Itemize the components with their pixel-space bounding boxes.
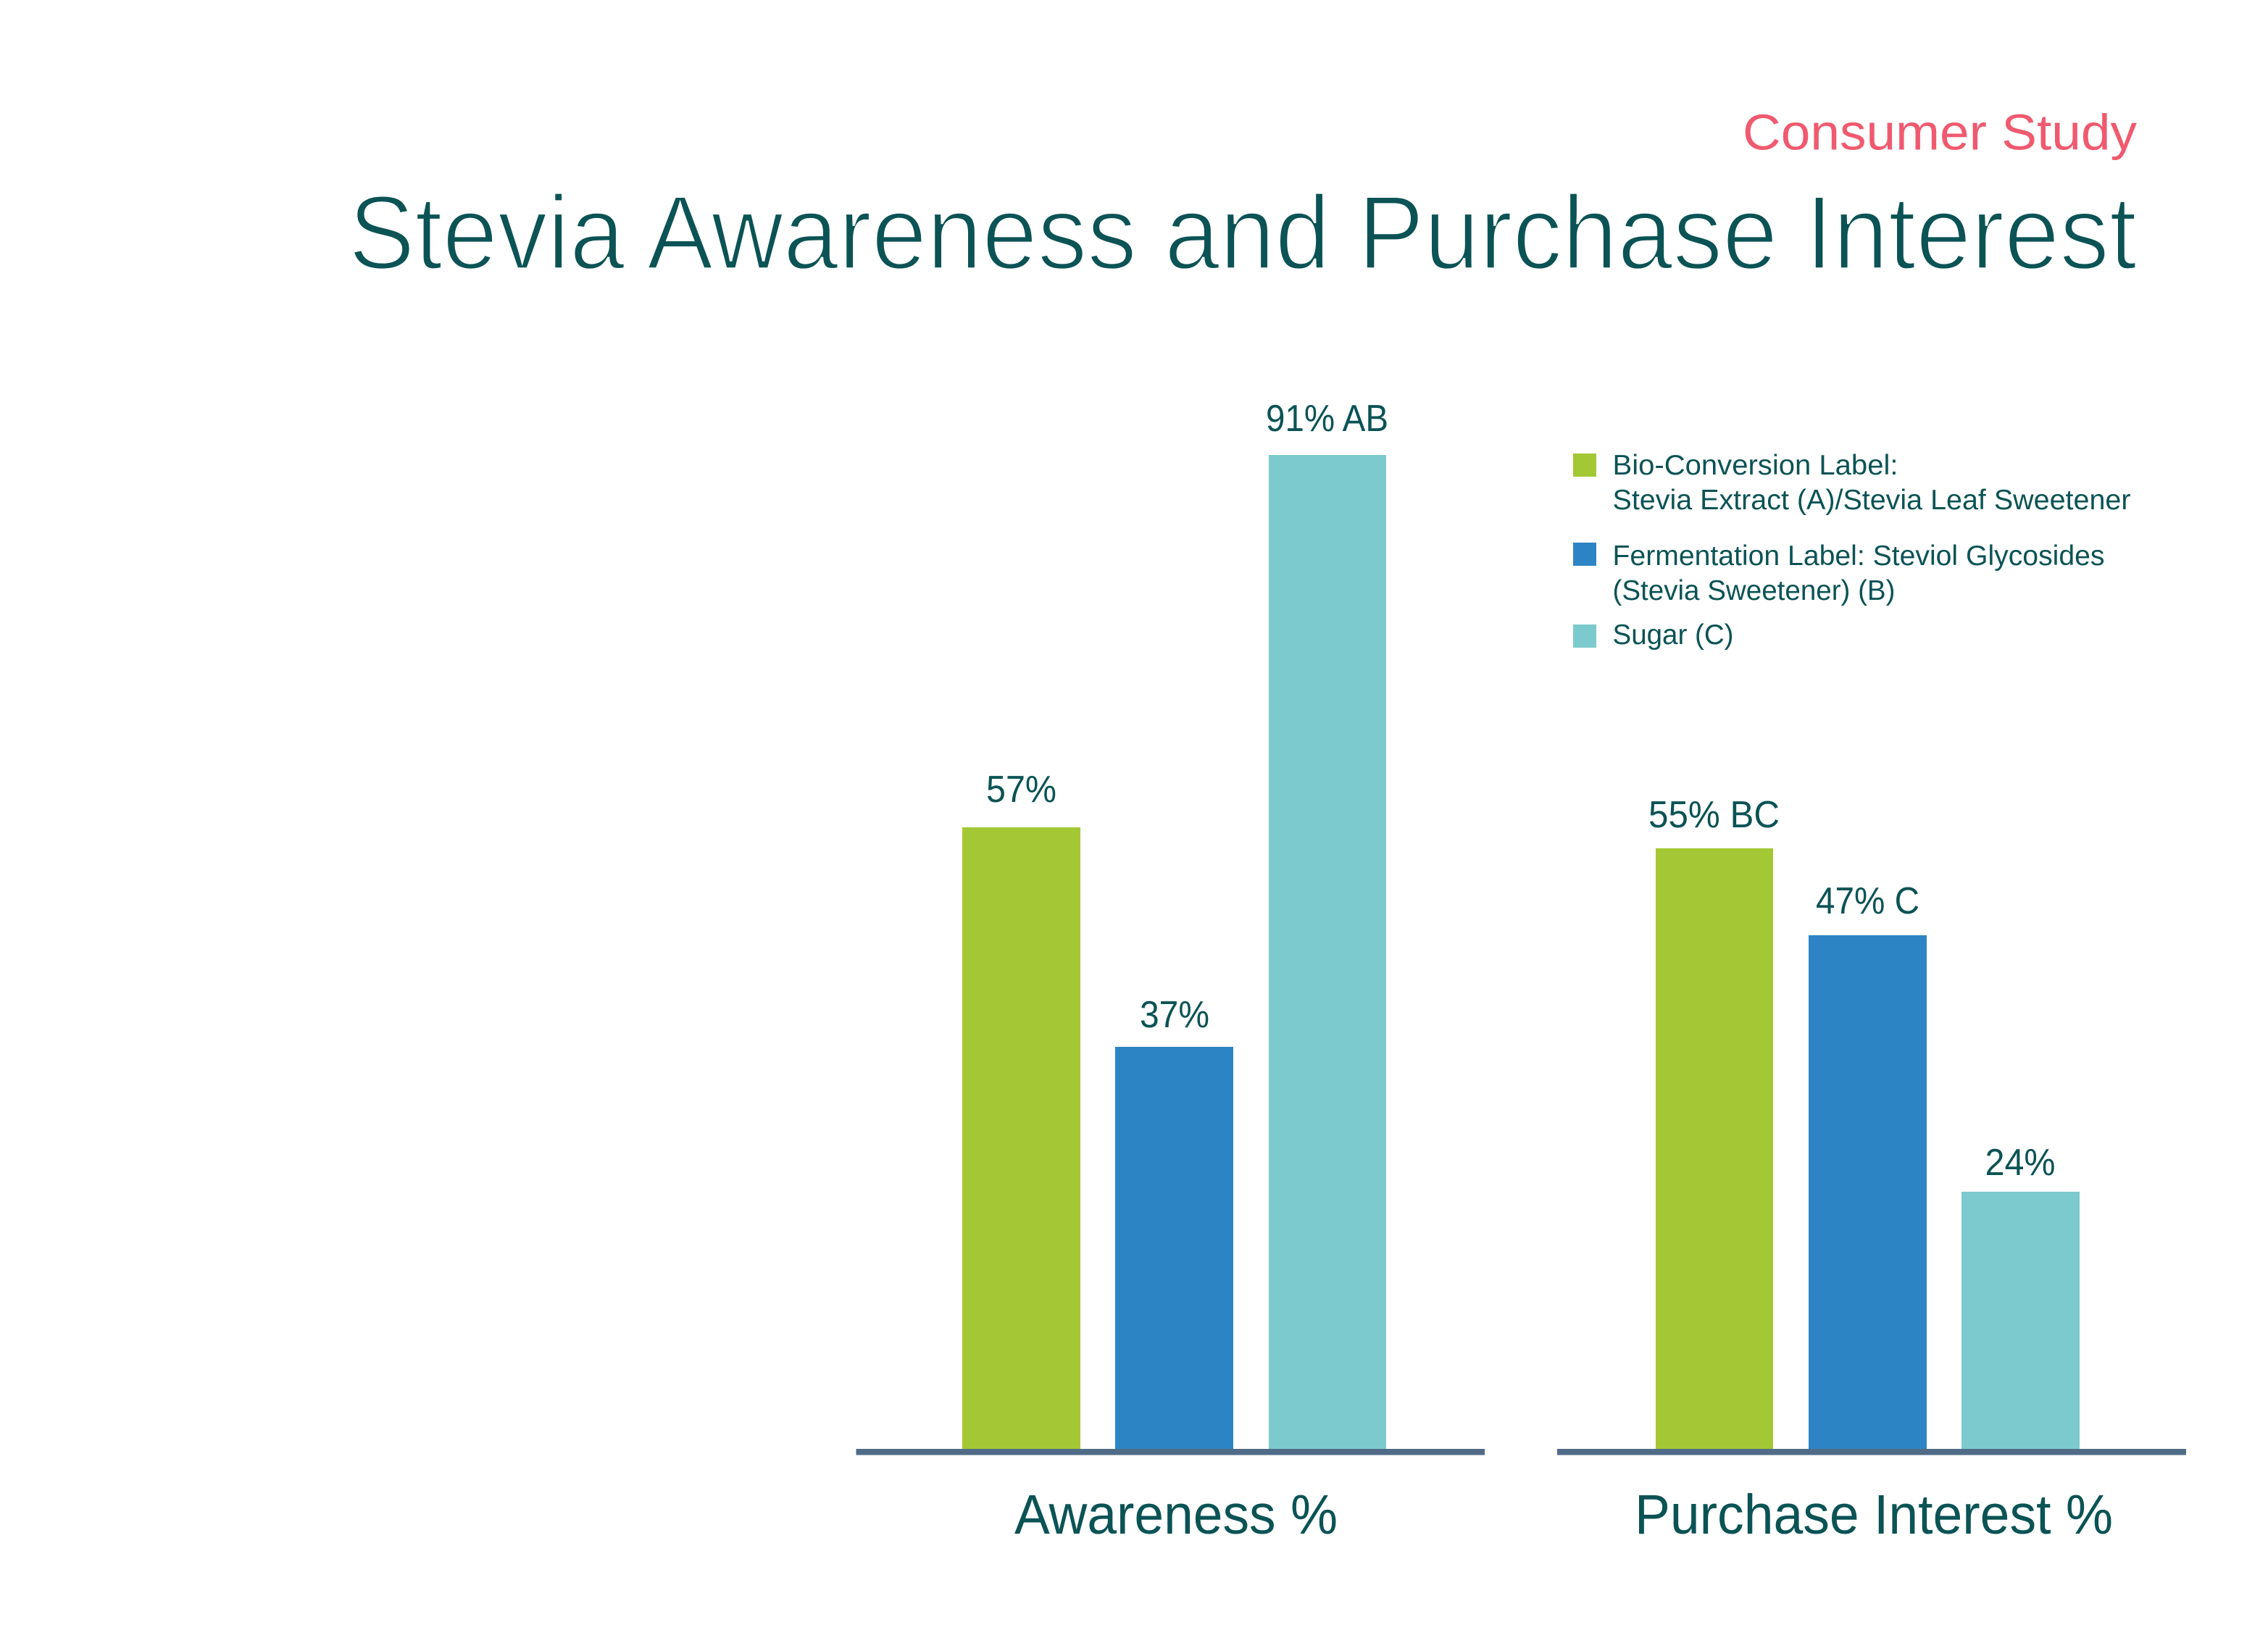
bar: awareness bio-conversion 57% [962,827,1080,1450]
legend swatch: fermentation [1573,543,1596,566]
eyebrow: Consumer Study: Consumer Study [1743,104,2137,161]
legend swatch: sugar [1573,624,1596,648]
bar: awareness sugar 91% [1269,455,1386,1450]
axis label: Awareness %: Awareness % [1014,1484,1338,1546]
legend swatch: bio-conversion [1573,454,1596,477]
value label: 24%: 24% [1985,1142,2055,1184]
bar chart: Awareness % [856,398,1485,1546]
title: Stevia Awareness and Purchase Interest [349,174,2137,291]
legend text: fermentation [1613,540,2104,606]
axis line: awareness [856,1449,1485,1455]
bar: purchase bio-conversion 55% [1656,848,1773,1450]
legend text: fermentation: (Stevia Sweetener) (B) [1613,575,1896,606]
bar: purchase fermentation 47% [1809,935,1927,1450]
bar chart: Purchase Interest % [1557,794,2186,1546]
value label: 55% BC: 55% BC [1648,794,1780,836]
value label: 57%: 57% [986,769,1056,811]
axis line: purchase [1557,1449,2186,1455]
legend [1573,450,2131,651]
legend text: bio-conversion [1613,450,2131,516]
bar: awareness fermentation 37% [1115,1047,1233,1450]
legend text: sugar: Sugar (C) [1613,619,1733,651]
value label: 47% C: 47% C [1816,880,1919,922]
bar: purchase sugar 24% [1961,1192,2080,1450]
value label: 91% AB: 91% AB [1266,398,1388,440]
axis label: Purchase Interest %: Purchase Interest % [1635,1484,2113,1546]
legend text: bio-conversion: Bio-Conversion Label: [1613,450,1898,481]
legend text: bio-conversion: Stevia Extract (A)/Stevia Leaf Sweetener [1613,485,2131,516]
value label: 37%: 37% [1140,994,1209,1036]
legend text: fermentation: Fermentation Label: Steviol Glycosides [1613,540,2104,572]
